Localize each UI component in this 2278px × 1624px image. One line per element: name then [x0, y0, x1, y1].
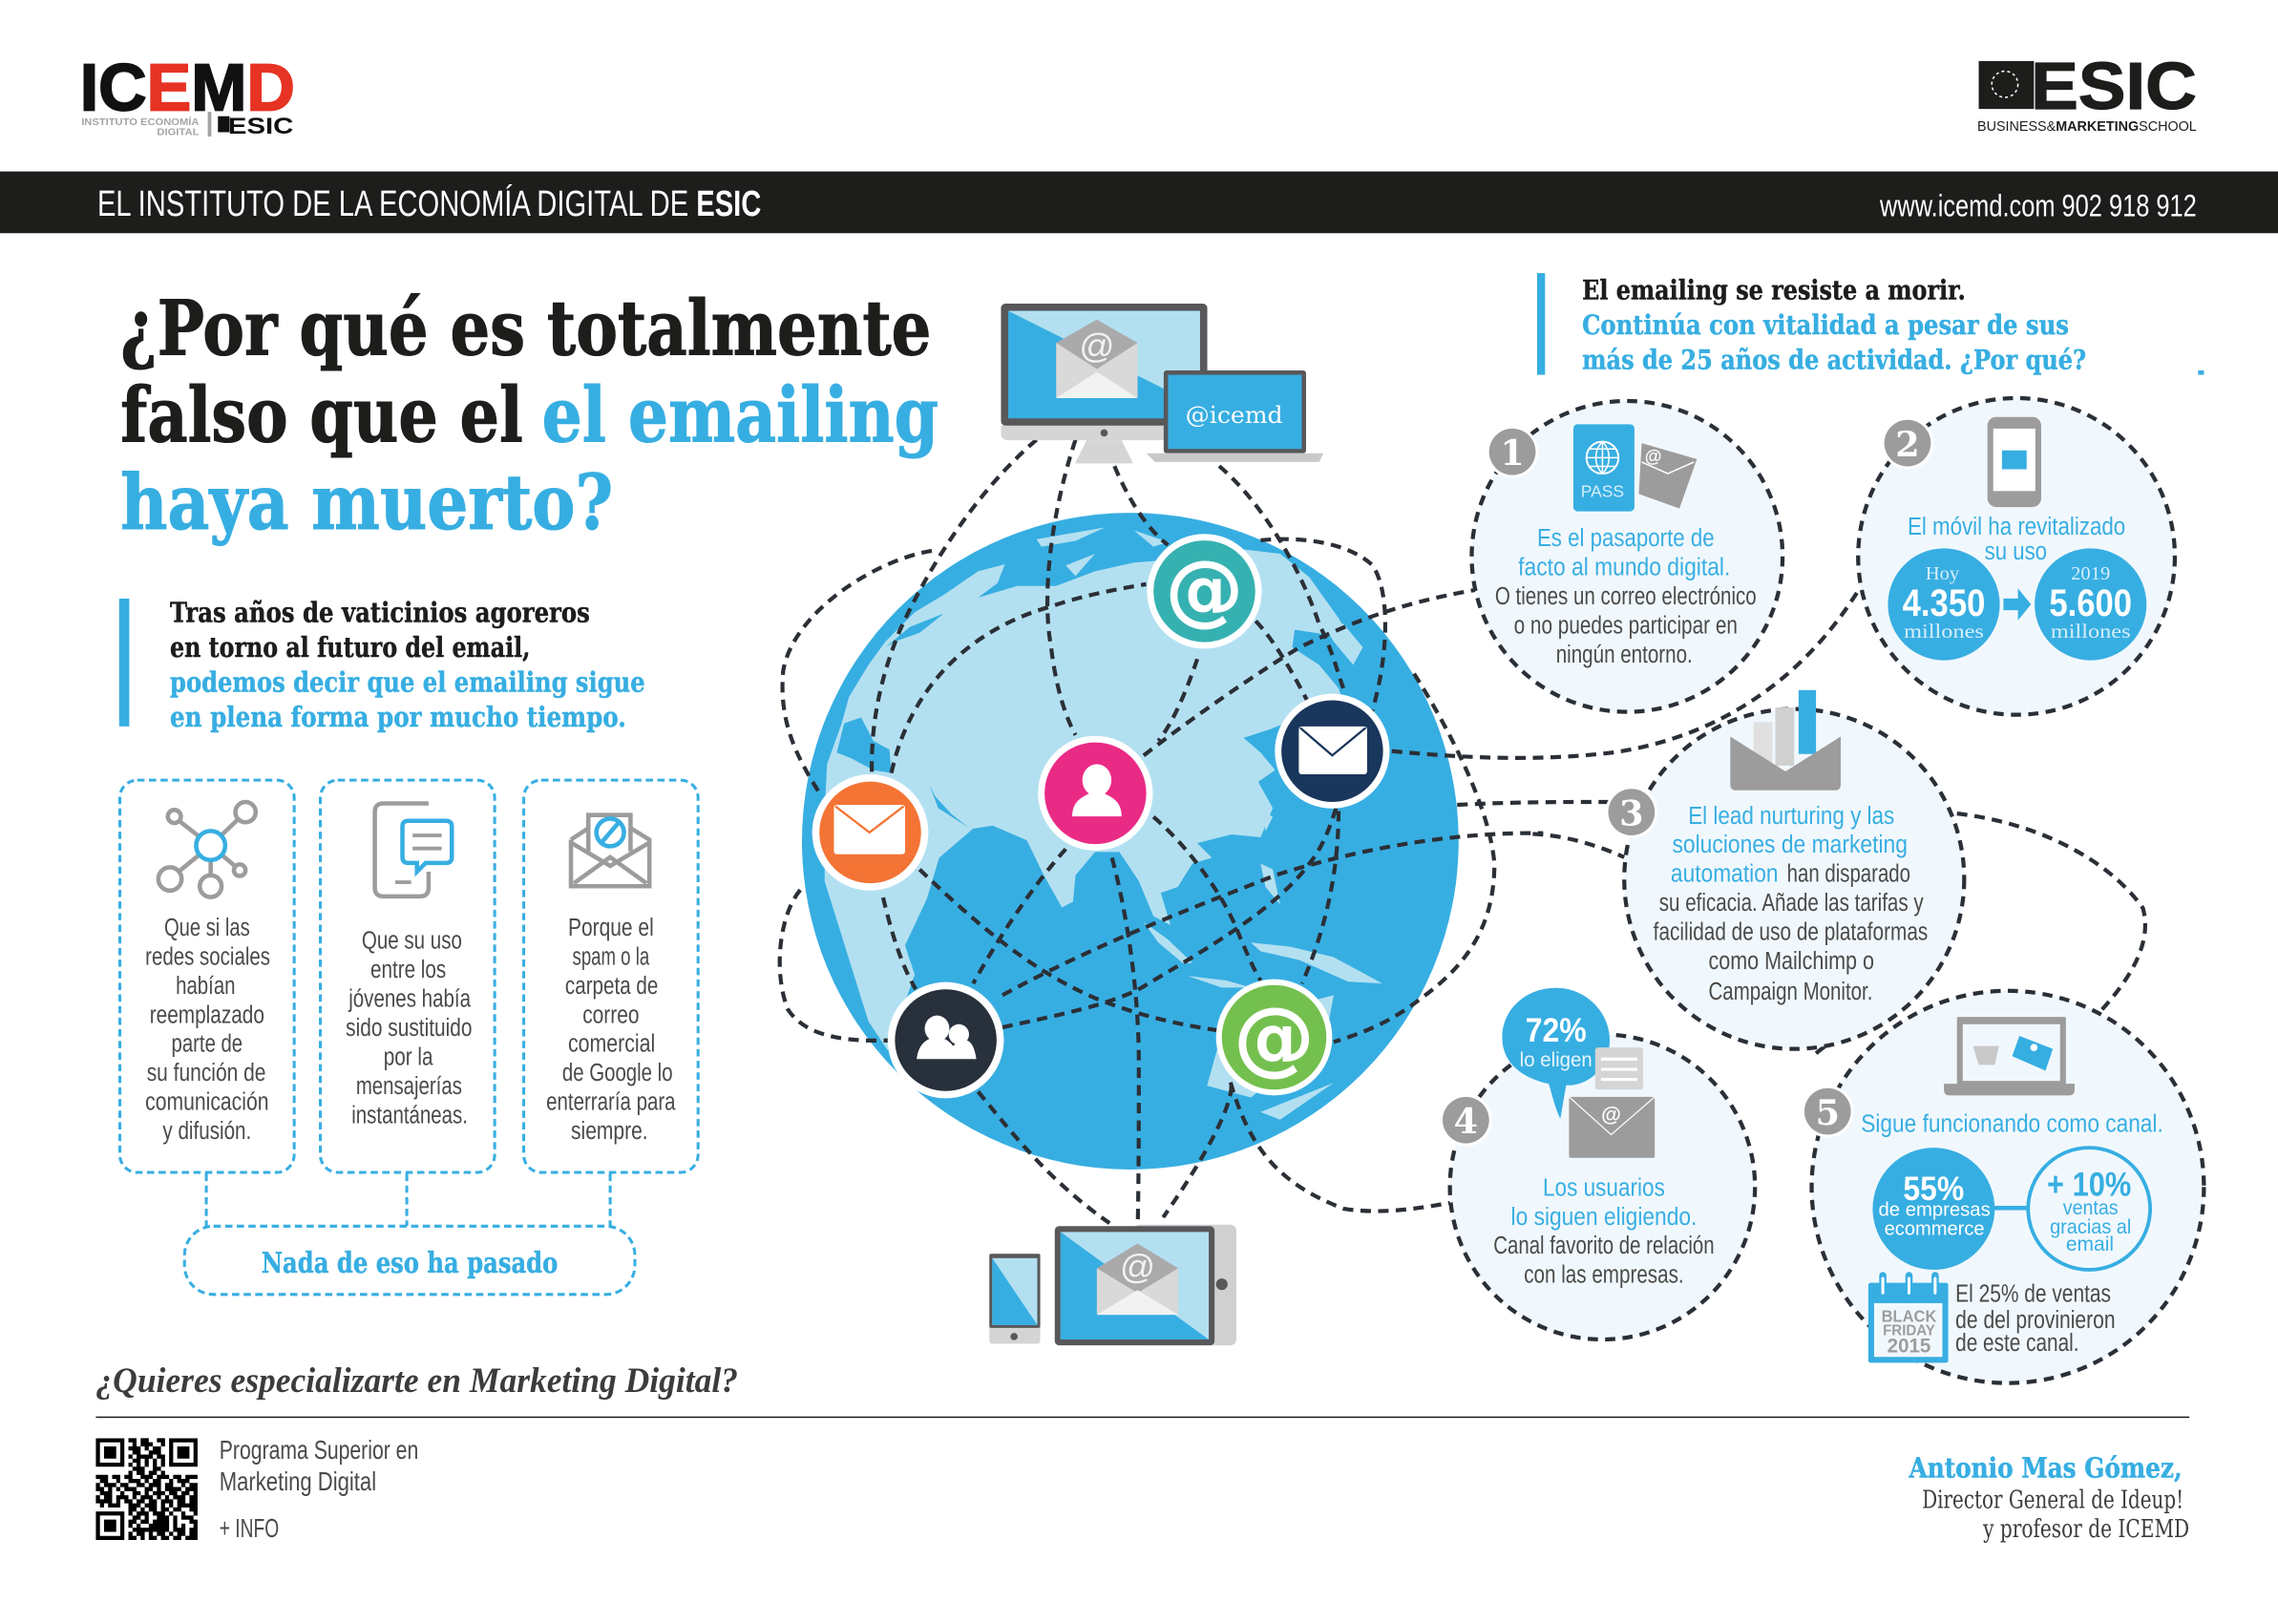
panel: reason 5: El 25% de ventas	[1955, 1280, 2111, 1307]
program info: + INFO	[220, 1513, 279, 1543]
panel: redes sociales: redes sociales	[145, 943, 270, 970]
icon: blocked envelope	[571, 815, 649, 886]
panel: jóvenes: Que su uso	[362, 928, 462, 955]
stat: today	[1888, 548, 2000, 661]
panel: redes sociales: reemplazado	[150, 1002, 264, 1028]
panel: reason 1	[1471, 401, 1782, 712]
panel: reason 3: su eficacia. Añade las tarifas y	[1659, 890, 1924, 917]
panel: spam: spam o la	[573, 943, 650, 970]
logo: ICEMD: DIGITAL	[157, 128, 199, 138]
panel: redes sociales: Que si las	[164, 915, 250, 941]
panel: spam: comercial	[568, 1031, 655, 1058]
icon: monitor	[1001, 304, 1208, 463]
intro text block: en torno al futuro del email,	[170, 631, 530, 664]
panel: spam: siempre.	[571, 1118, 648, 1145]
icon: pink person	[1038, 736, 1152, 851]
panel: jóvenes: por la	[384, 1044, 433, 1070]
icon: calendar: BLACK	[1882, 1307, 1937, 1326]
panel: jóvenes	[321, 780, 495, 1172]
panel: reason 1: Es el pasaporte de	[1537, 525, 1715, 552]
panel: redes sociales: su función de	[147, 1060, 265, 1086]
logo: ESIC: BUSINESS&MARKETINGSCHOOL	[1977, 118, 2197, 135]
connection lines	[780, 440, 1543, 1223]
stat: 2019	[2035, 548, 2146, 661]
stat: +10%: gracias al	[2050, 1215, 2131, 1238]
panel: spam: enterraría para	[546, 1089, 676, 1116]
stat: +10%: email	[2066, 1233, 2114, 1255]
logo: ICEMD: ESIC	[228, 114, 293, 139]
stat: 55%	[1872, 1148, 1994, 1270]
panel: redes sociales: habían	[176, 973, 236, 1000]
panel: redes sociales: comunicación	[145, 1089, 269, 1116]
panel: reason 1: facto al mundo digital.	[1518, 555, 1730, 581]
right intro text: El emailing se resiste a morir.	[1582, 274, 1966, 306]
icon: teal at: @	[1165, 544, 1244, 635]
panel: jóvenes: sido sustituido	[346, 1015, 473, 1042]
stat: today: millones	[1904, 620, 1984, 643]
land	[825, 548, 1356, 1051]
arrow	[2003, 588, 2031, 621]
stat: 2019: 5.600	[2049, 582, 2132, 624]
logo: ESIC: ESIC	[2031, 49, 2197, 123]
logo: ESIC	[1977, 49, 2197, 135]
stat: 55%: de empresas	[1879, 1199, 1991, 1221]
panel: reason 3: soluciones de marketing	[1672, 832, 1908, 858]
icon: laptop shop	[1944, 1017, 2075, 1095]
title: falso que el	[120, 371, 523, 460]
title: haya muerto?	[120, 458, 613, 547]
icon: network	[158, 802, 256, 897]
panel: spam: carpeta de	[565, 973, 658, 1000]
icon: tablet	[1055, 1225, 1236, 1345]
panel: reason 3	[1605, 690, 1964, 1049]
title: el emailing	[542, 371, 939, 460]
panel: reason 4	[1440, 988, 1755, 1339]
icon: passport and envelope: @	[1645, 446, 1662, 466]
badge 1: 1	[1500, 432, 1525, 474]
icon: laptop	[1147, 370, 1323, 462]
panel: jóvenes: mensajerías	[356, 1073, 462, 1100]
panel: redes sociales: parte de	[172, 1031, 243, 1058]
icon: speech bubble 72%: 72%	[1526, 1012, 1587, 1049]
panel: reason 3: El lead nurturing y las	[1688, 803, 1894, 830]
right intro text	[1537, 273, 2204, 376]
panel: reason 3: Campaign Monitor.	[1709, 979, 1872, 1005]
badge 2: 2	[1895, 424, 1920, 465]
icon: dark people	[888, 982, 1003, 1098]
icon: speech bubble 72%	[1502, 988, 1610, 1119]
panel: reason 3: facilidad de uso de plataformas	[1654, 919, 1928, 946]
panel: redes sociales: y difusión.	[162, 1118, 251, 1145]
icon: teal at	[1147, 534, 1262, 648]
intro text block	[119, 596, 645, 733]
panel: jóvenes: jóvenes había	[348, 986, 472, 1013]
footer question: ¿Quieres especializarte en Marketing Digital?	[95, 1360, 738, 1400]
connectors and conclusion box: Nada de eso ha pasado	[262, 1246, 558, 1279]
panel: reason 5: de del provinieron	[1955, 1307, 2116, 1334]
title: ¿Por qué es totalmente	[120, 284, 931, 372]
header bar: EL INSTITUTO DE LA ECONOMÍA DIGITAL DE ESIC	[97, 183, 761, 224]
icon: calendar	[1868, 1276, 1949, 1362]
badge 3: 3	[1619, 792, 1644, 833]
icon: green at: @	[1234, 990, 1315, 1085]
icon: monitor: @	[1079, 326, 1114, 365]
icon: passport and envelope: PASS	[1581, 481, 1624, 500]
badge 2	[1882, 417, 1933, 470]
program info: Programa Superior en	[220, 1435, 418, 1465]
panel: reason 1: ningún entorno.	[1556, 642, 1693, 668]
QR code	[95, 1438, 198, 1540]
panel: reason 1: o no puedes participar en	[1514, 612, 1738, 639]
author credit	[1909, 1452, 2189, 1544]
program info: Marketing Digital	[220, 1466, 376, 1496]
header bar: www.icemd.com 902 918 912	[1879, 189, 2197, 223]
panel: reason 3: automation	[1671, 861, 1779, 888]
globe	[802, 513, 1459, 1170]
badge 4	[1440, 1094, 1492, 1147]
panel: spam: correo	[582, 1002, 640, 1028]
connectors and conclusion box	[184, 1174, 635, 1295]
panel: reason 3: como Mailchimp o	[1709, 948, 1874, 975]
right intro text: más de 25 años de actividad. ¿Por qué?	[1582, 345, 2086, 376]
panel: spam: de Google lo	[562, 1060, 673, 1086]
logo: ICEMD: INSTITUTO ECONOMÍA	[81, 117, 199, 128]
stat: 2019: millones	[2051, 620, 2131, 643]
icon: orange mail	[812, 774, 928, 891]
stat: today: 4.350	[1903, 582, 1985, 624]
badge 5: 5	[1816, 1092, 1840, 1133]
panel: reason 4: con las empresas.	[1524, 1262, 1684, 1289]
icon: phone chat	[375, 803, 452, 896]
stat: 55%: ecommerce	[1885, 1217, 1985, 1239]
panel: reason 3: han disparado	[1787, 861, 1910, 888]
icon: passport and envelope	[1573, 424, 1697, 512]
stat: +10%: ventas	[2063, 1196, 2119, 1219]
author credit: y profesor de ICEMD	[1982, 1515, 2189, 1544]
icon: calendar: FRIDAY	[1883, 1322, 1935, 1339]
panel: spam	[524, 780, 698, 1172]
panel: reason 2: El móvil ha revitalizado	[1908, 514, 2125, 540]
panel: reason 2: su uso	[1985, 538, 2047, 565]
panel: reason 4: lo siguen eligiendo.	[1511, 1204, 1697, 1231]
panel: reason 5	[1802, 991, 2204, 1383]
badge 1	[1487, 426, 1538, 478]
icon: tablet: @	[1120, 1247, 1155, 1286]
intro text block: en plena forma por mucho tiempo.	[170, 701, 626, 733]
stat: 55%: 55%	[1903, 1171, 1964, 1208]
panel: reason 1: O tienes un correo electrónico	[1495, 583, 1757, 610]
icon: envelope with bars	[1730, 690, 1841, 791]
panel: reason 4: Canal favorito de relación	[1493, 1233, 1715, 1259]
badge 3	[1605, 786, 1657, 838]
logo: ICEMD: ICEMD	[80, 51, 295, 125]
stat: today: Hoy	[1926, 563, 1960, 584]
icon: envelope	[1569, 1097, 1655, 1158]
panel: jóvenes: instantáneas.	[351, 1102, 468, 1128]
intro text block: podemos decir que el emailing sigue	[170, 665, 645, 698]
icon: document	[1595, 1047, 1643, 1089]
badge 4: 4	[1454, 1101, 1478, 1142]
panel: jóvenes: entre los	[370, 957, 446, 983]
icon: smartphone	[1988, 417, 2041, 507]
title	[120, 284, 939, 547]
header bar	[0, 172, 2278, 233]
panel: reason 4: Los usuarios	[1543, 1174, 1665, 1201]
icon: phone device	[989, 1254, 1041, 1344]
badge 5	[1802, 1086, 1854, 1137]
panel: reason 2	[1858, 398, 2175, 715]
icon: laptop: @icemd	[1186, 401, 1283, 429]
stat: 2019: 2019	[2071, 563, 2110, 584]
icon: calendar: 2015	[1888, 1335, 1930, 1358]
panel: redes sociales	[120, 780, 294, 1172]
icon: envelope: @	[1601, 1104, 1621, 1127]
intro text block: Tras años de vaticinios agoreros	[170, 596, 590, 628]
icon: navy mail	[1275, 694, 1389, 809]
stat: +10%	[2028, 1148, 2150, 1270]
program info	[220, 1435, 418, 1543]
icon: speech bubble 72%: lo eligen	[1520, 1048, 1592, 1071]
author credit: Antonio Mas Gómez,	[1909, 1452, 2183, 1485]
panel: reason 5: de este canal.	[1955, 1330, 2079, 1357]
author credit: Director General de Ideup!	[1922, 1487, 2183, 1515]
right intro text: Continúa con vitalidad a pesar de sus	[1582, 309, 2069, 341]
icon: green at	[1216, 980, 1332, 1095]
panel: spam: Porque el	[568, 915, 654, 941]
stat: +10%: + 10%	[2047, 1166, 2131, 1203]
panel: reason 5: Sigue funcionando como canal.	[1861, 1110, 2163, 1137]
